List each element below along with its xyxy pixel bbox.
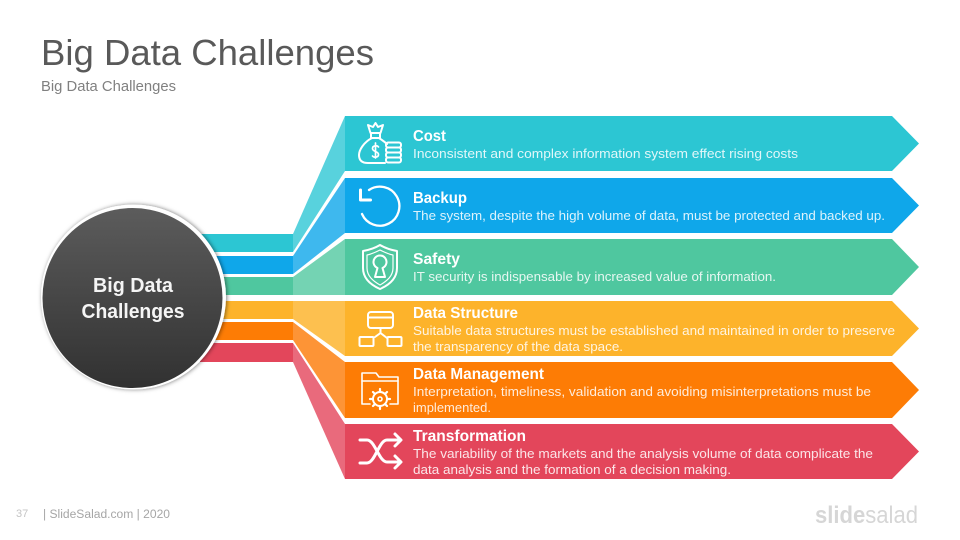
icon: shield with keyhole [363,245,397,289]
data management description [413,384,871,415]
footer page number: 37 [16,508,28,520]
transformation heading: Transformation [413,428,526,445]
data management description: implemented. [413,400,491,415]
data management description: Interpretation, timeliness, validation and avoiding misinterpretations must be [413,384,871,399]
backup heading: Backup [413,190,467,207]
connector trapezoids [293,116,345,479]
safety heading: Safety [413,251,460,268]
panel: cost [345,116,919,171]
data structure description [413,323,895,354]
footer credit: | SlideSalad.com | 2020 [43,509,170,521]
panel: data management [345,362,919,418]
icon: undo circle [360,187,399,226]
transformation description: data analysis and the formation of a decision making. [413,462,731,477]
central circle: Challenges [82,301,184,323]
title: Big Data Challenges [41,32,374,73]
connector bars [200,234,293,362]
subtitle: Big Data Challenges [41,79,176,95]
panel: data structure [345,301,919,356]
icon: folder with gear [362,373,398,409]
panel: backup [345,178,919,233]
data structure heading: Data Structure [413,305,518,322]
central circle [41,204,226,390]
icon: shuffle arrows [360,434,401,468]
safety description: IT security is indispensable by increased value of information. [413,269,776,284]
data management heading: Data Management [413,366,545,383]
transformation description: The variability of the markets and the analysis volume of data complicate the [413,446,873,461]
cost heading: Cost [413,128,447,145]
logo: slidesalad [815,502,918,529]
data structure description: Suitable data structures must be established and maintained in order to preserve [413,323,895,338]
panel: safety [345,239,919,295]
circle label: Big Data [93,275,174,297]
backup description: The system, despite the high volume of data, must be protected and backed up. [413,208,885,223]
icon: money bag and coins [359,123,401,163]
data structure description: the transparency of the data space. [413,339,623,354]
panel: transformation [345,424,919,479]
icon: browser window flow [360,312,402,346]
transformation description [413,446,873,477]
cost description: Inconsistent and complex information system effect rising costs [413,146,799,161]
